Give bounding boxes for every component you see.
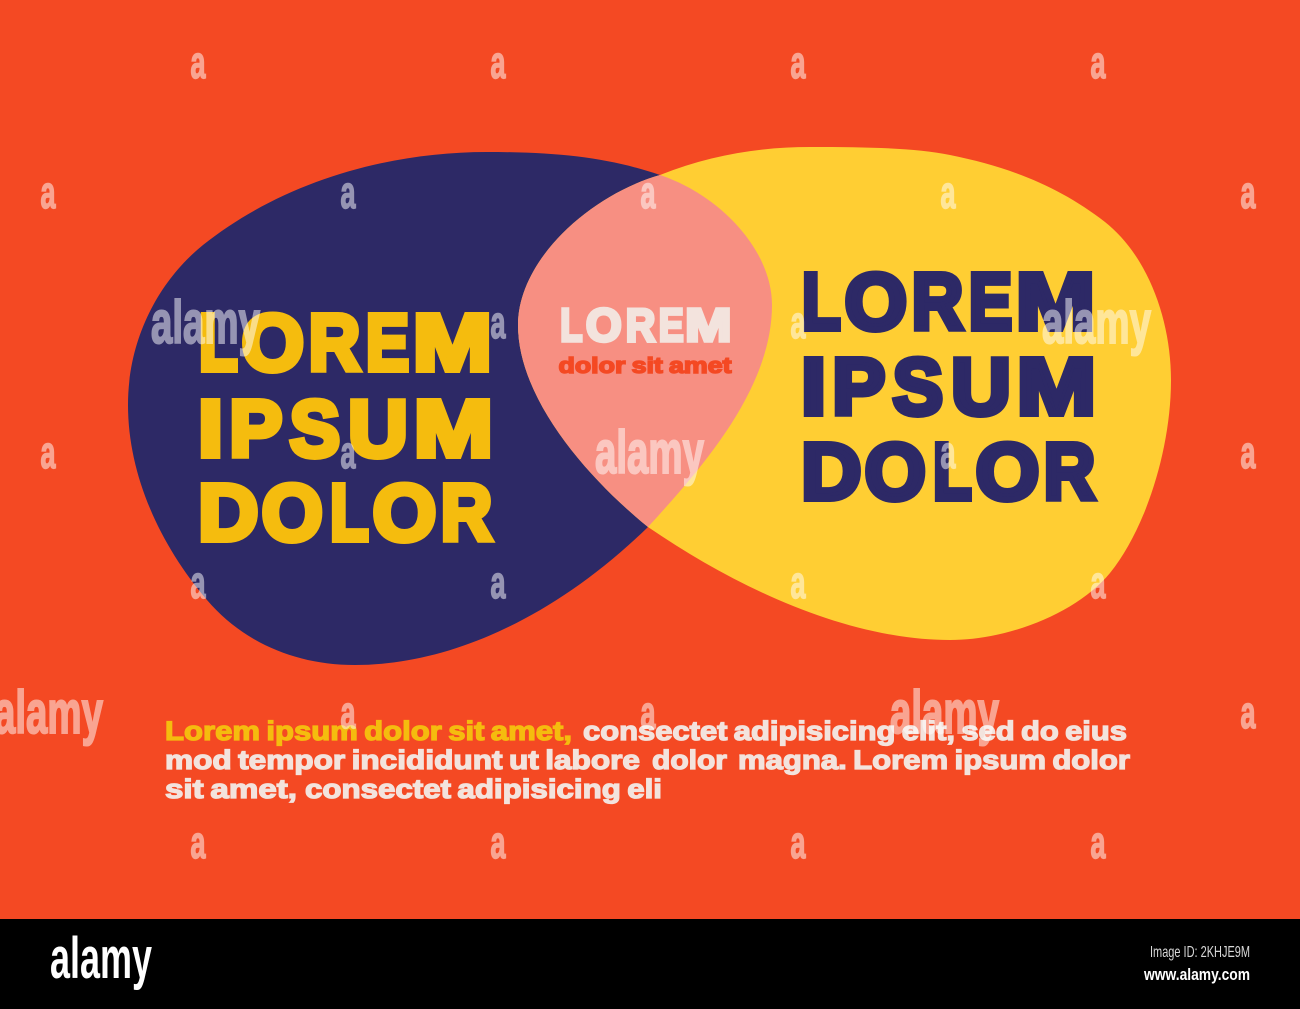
heading: left blob title: P: [229, 384, 282, 473]
watermark pattern: a: [790, 297, 806, 348]
text block: description paragraph: Lorem ipsum dolor sit amet,: [165, 716, 572, 746]
text block: description paragraph: consectet adipisicing eli: [305, 774, 662, 804]
heading: right blob title: O: [845, 257, 907, 346]
text block: description paragraph: [165, 716, 1131, 804]
watermark pattern: a: [490, 37, 506, 88]
watermark pattern: alamy: [1042, 289, 1151, 356]
heading: right blob title: U: [951, 342, 1011, 431]
heading: right blob title: L: [802, 257, 841, 346]
image id: Image ID: 2KHJE9M: [1150, 944, 1250, 961]
watermark pattern: a: [1090, 817, 1106, 868]
heading: left blob title: O: [242, 298, 304, 387]
heading: right blob title: O: [865, 427, 926, 516]
watermark pattern: a: [790, 557, 806, 608]
text block: description paragraph: sit amet,: [165, 774, 297, 804]
footer logo: alamy: [50, 926, 152, 991]
watermark pattern: a: [790, 37, 806, 88]
watermark pattern: a: [1090, 37, 1106, 88]
heading: left blob title: R: [309, 298, 360, 387]
watermark pattern: alamy: [890, 679, 999, 746]
watermark pattern: a: [940, 427, 956, 478]
overlap: pink intersection: [518, 175, 772, 527]
heading: left blob title: R: [441, 468, 492, 557]
heading: left blob title: I: [198, 384, 223, 473]
heading: right blob title: R: [1044, 427, 1095, 516]
watermark pattern: a: [1240, 427, 1256, 478]
heading: left blob title: L: [330, 468, 369, 557]
heading: left blob title: D: [198, 468, 258, 557]
venn diagram: [128, 147, 1171, 665]
heading: overlap title: [558, 299, 732, 378]
text block: description paragraph: mod tempor incididunt ut labore: [165, 745, 640, 775]
heading: left blob title: U: [348, 384, 408, 473]
text block: description paragraph: magna. Lorem ipsum dolor: [738, 745, 1131, 775]
footer bar: [0, 919, 1300, 1009]
watermark pattern: a: [490, 557, 506, 608]
watermark pattern: a: [790, 817, 806, 868]
watermark pattern: a: [40, 167, 56, 218]
heading: overlap title: M: [685, 299, 732, 351]
heading: right blob title: [801, 257, 1096, 516]
watermark pattern: a: [1240, 687, 1256, 738]
heading: left blob title: M: [413, 298, 492, 387]
watermark pattern: a: [490, 297, 506, 348]
heading: right blob title: O: [976, 427, 1039, 516]
watermark pattern: alamy: [151, 289, 260, 356]
heading: left blob title: O: [262, 468, 323, 557]
heading: left blob title: [198, 298, 493, 557]
watermark pattern: a: [940, 167, 956, 218]
heading: overlap title: O: [586, 299, 622, 351]
text block: description paragraph: dolor: [652, 745, 728, 775]
circle: right yellow blob: [518, 147, 1171, 640]
watermark pattern: a: [1090, 557, 1106, 608]
watermark pattern: a: [340, 687, 356, 738]
heading: right blob title: M: [1016, 257, 1095, 346]
heading: right blob title: D: [801, 427, 861, 516]
heading: right blob title: L: [933, 427, 972, 516]
watermark pattern: a: [340, 167, 356, 218]
watermark pattern: a: [340, 427, 356, 478]
heading: left blob title: L: [199, 298, 238, 387]
heading: right blob title: M: [1017, 342, 1096, 431]
website: www.alamy.com: [1143, 965, 1250, 984]
watermark pattern: a: [640, 687, 656, 738]
watermark pattern: [0, 37, 1256, 868]
heading: overlap title: E: [659, 299, 684, 351]
watermark pattern: alamy: [595, 419, 704, 486]
heading: right blob title: P: [832, 342, 885, 431]
heading: right blob title: I: [801, 342, 826, 431]
text block: description paragraph: consectet adipisicing elit, sed do eius: [583, 716, 1127, 746]
heading: right blob title: E: [969, 257, 1012, 346]
heading: overlap title: R: [626, 299, 655, 351]
watermark pattern: a: [640, 167, 656, 218]
heading: right blob title: R: [912, 257, 963, 346]
watermark pattern: a: [40, 427, 56, 478]
heading: overlap title: dolor sit amet: [558, 353, 732, 378]
watermark pattern: a: [190, 817, 206, 868]
heading: overlap title: L: [560, 299, 582, 351]
circle: left navy blob: [128, 152, 772, 665]
heading: left blob title: E: [366, 298, 409, 387]
watermark pattern: a: [190, 557, 206, 608]
watermark pattern: a: [490, 817, 506, 868]
watermark pattern: a: [190, 37, 206, 88]
heading: right blob title: S: [893, 342, 943, 431]
watermark pattern: a: [1240, 167, 1256, 218]
heading: left blob title: O: [373, 468, 436, 557]
heading: left blob title: M: [414, 384, 493, 473]
heading: left blob title: S: [290, 384, 340, 473]
